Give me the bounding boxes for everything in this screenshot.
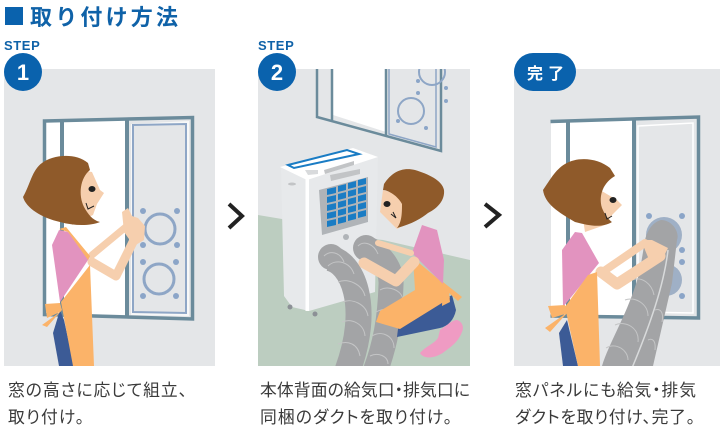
caption: step 3: 窓パネルにも給気・排気 (515, 381, 696, 400)
duct: step 3 (602, 220, 678, 368)
panel: step 3 (514, 69, 720, 368)
done badge: 完了 (527, 65, 569, 83)
caption: step 1: 取り付け。 (8, 408, 84, 427)
panel: step 2 (258, 59, 470, 372)
floor (258, 215, 470, 366)
step 1 badge: STEP (4, 38, 40, 53)
window: step 3 (550, 117, 698, 318)
step 2 badge (258, 38, 296, 91)
arrow 1 (229, 204, 242, 228)
panel: step 1 (4, 69, 215, 366)
caption: step 2: 同梱のダクトを取り付け。 (260, 408, 452, 427)
caption: step 1 (8, 381, 187, 427)
caption: step 3: ダクトを取り付け、完了。 (515, 408, 695, 427)
step 1 badge: 1 (17, 60, 29, 85)
step 2 badge: STEP (258, 38, 294, 53)
air conditioner (280, 148, 378, 316)
woman: step 3 (543, 159, 668, 366)
ducts: step 2 (318, 235, 403, 372)
arrow 2 (485, 204, 499, 227)
caption: step 3 (515, 381, 696, 427)
caption: step 2: 本体背面の給気口・排気口に (260, 381, 470, 400)
woman: step 1 (23, 156, 145, 366)
step 1 badge (4, 38, 42, 91)
done badge (514, 53, 576, 91)
window: step 2 (317, 59, 448, 151)
caption: step 1: 窓の高さに応じて組立、 (8, 381, 187, 400)
window: step 1 (44, 118, 192, 319)
title: 取り付け方法 (30, 5, 181, 30)
woman: step 2 (364, 169, 463, 357)
caption: step 2 (260, 381, 470, 427)
step 2 badge: 2 (271, 60, 283, 85)
